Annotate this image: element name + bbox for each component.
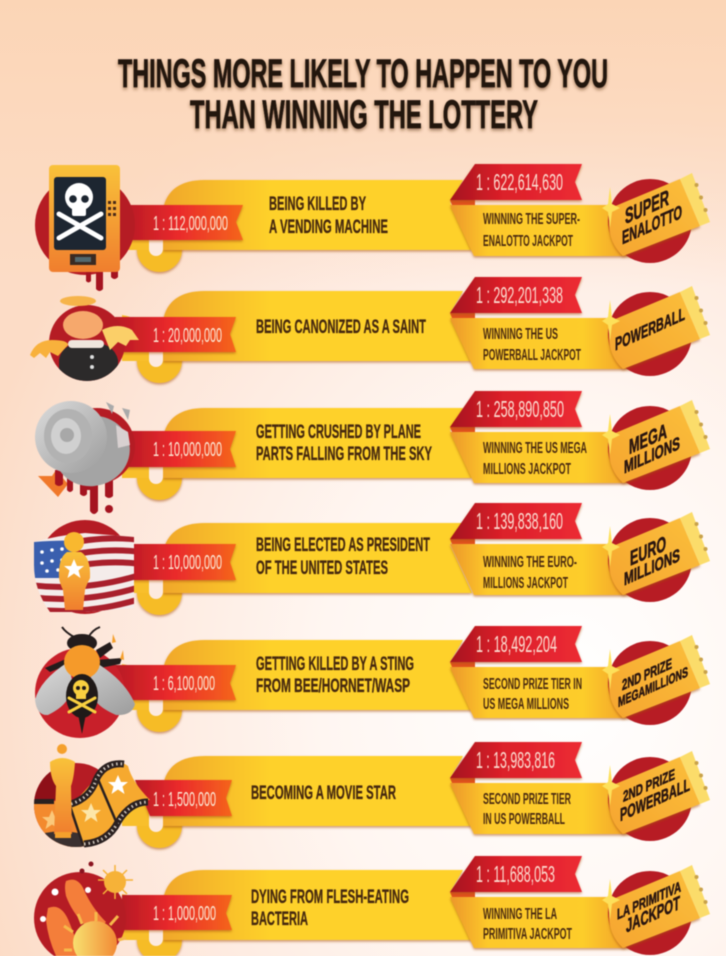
odds ribbon: 1 in 112,000,000 [125,205,243,240]
event text: BEING KILLED BY [269,194,366,215]
lottery panel with ticket: 1 : 139,838,160 [476,508,563,534]
lottery panel with ticket: EURO [630,531,666,571]
lottery panel with ticket [450,503,710,602]
event text: BEING CANONIZED AS A SAINT [256,317,426,338]
lottery panel with ticket: 1 : 18,492,204 [476,631,557,657]
odds ribbon: 1 in 10,000,000 [125,544,236,580]
odds ribbon: 1 in 20,000,000: 1 : 20,000,000 [153,325,222,347]
icon: falling jet engine [35,401,138,514]
event text: BACTERIA [251,909,308,930]
row 7: flesh-eating bacteria versus La Primitiva [34,856,710,956]
odds ribbon: 1 in 6,100,000 [115,665,236,700]
odds ribbon: 1 in 1,500,000 [135,780,232,816]
icon: deadly bee [35,627,135,738]
row 1: vending machine versus SuperEnalotto [35,164,710,291]
icon: film reel and golden statue [30,744,150,851]
lottery panel with ticket: IN US POWERBALL [483,811,565,828]
lottery panel with ticket [450,391,710,490]
icon: vending machine with skull [35,165,135,291]
event text: GETTING CRUSHED BY PLANE [256,422,421,443]
event text: PARTS FALLING FROM THE SKY [256,444,432,465]
lottery panel with ticket: 1 : 622,614,630 [476,169,563,195]
row 4: US president versus EuroMillions [30,503,710,615]
lottery panel with ticket: 2ND PRIZE [623,766,675,806]
yellow banner [122,640,472,732]
lottery panel with ticket: MEGAMILLIONS [618,665,688,711]
odds ribbon: 1 in 1,000,000: 1 : 1,000,000 [153,903,216,925]
event text [251,887,409,930]
lottery panel with ticket: WINNING THE US [483,326,558,343]
lottery panel with ticket [450,277,710,376]
yellow banner [122,870,472,956]
odds ribbon: 1 in 10,000,000 [125,431,236,467]
event text [256,422,432,465]
lottery panel with ticket: WINNING THE EURO- [483,554,577,571]
event text: BECOMING A MOVIE STAR [251,783,396,804]
lottery panel with ticket: 1 : 292,201,338 [476,282,563,308]
lottery panel with ticket: WINNING THE SUPER- [483,211,580,228]
event text: GETTING KILLED BY A STING [256,654,414,675]
title [118,52,608,137]
lottery panel with ticket: POWERBALL JACKPOT [483,347,581,364]
yellow banner [122,291,472,383]
event text: OF THE UNITED STATES [256,558,388,579]
lottery panel with ticket: MILLIONS [624,432,680,477]
odds ribbon: 1 in 112,000,000: 1 : 112,000,000 [153,213,228,235]
lottery panel with ticket: 1 : 13,983,816 [476,747,555,773]
lottery panel with ticket: PRIMITIVA JACKPOT [483,926,572,943]
yellow banner [122,756,472,848]
lottery panel with ticket: MILLIONS JACKPOT [483,461,571,478]
odds ribbon: 1 in 6,100,000: 1 : 6,100,000 [153,673,215,695]
row 6: movie star versus Powerball second prize [30,742,710,851]
lottery panel with ticket: MEGA [629,418,667,459]
event text: DYING FROM FLESH-EATING [251,887,409,908]
lottery panel with ticket [450,626,710,725]
lottery panel with ticket: ENALOTTO [622,202,682,249]
odds ribbon: 1 in 1,000,000 [122,895,232,930]
row 5: bee sting versus Mega Millions second prize [35,626,710,738]
lottery panel with ticket: ENALOTTO JACKPOT [483,233,573,250]
lottery panel with ticket [450,742,710,841]
lottery panel with ticket: WINNING THE LA [483,906,557,923]
odds ribbon: 1 in 1,500,000: 1 : 1,500,000 [153,789,216,811]
lottery panel with ticket: MILLIONS [624,544,680,589]
row 2: canonized saint versus Powerball [30,277,710,383]
lottery panel with ticket [450,856,710,955]
odds ribbon: 1 in 20,000,000 [115,317,236,352]
odds ribbon: 1 in 10,000,000: 1 : 10,000,000 [153,439,222,461]
row 3: plane parts versus Mega Millions [35,391,710,514]
lottery panel with ticket: WINNING THE US MEGA [483,440,587,457]
event text [269,194,388,238]
lottery panel with ticket: MILLIONS JACKPOT [483,575,568,592]
lottery panel with ticket: JACKPOT [626,892,680,937]
lottery panel with ticket: 1 : 258,890,850 [476,396,564,422]
yellow banner [122,180,472,272]
lottery panel with ticket: 2ND PRIZE [622,656,672,694]
lottery panel with ticket: US MEGA MILLIONS [483,696,569,713]
icon: American flag and president figure [30,520,140,615]
icon: bacteria and virus [34,862,133,956]
event text [256,535,430,579]
lottery panel with ticket: SECOND PRIZE TIER IN [483,676,582,693]
event text [256,654,414,697]
lottery panel with ticket [450,164,710,263]
icon: saint with halo and wings [30,296,139,381]
lottery panel with ticket: 1 : 11,688,053 [476,861,555,887]
lottery panel with ticket: SUPER [625,184,669,229]
yellow banner [122,408,472,500]
event text: FROM BEE/HORNET/WASP [256,676,410,697]
event text: BEING ELECTED AS PRESIDENT [256,535,430,556]
event text: A VENDING MACHINE [269,217,388,238]
lottery panel with ticket: SECOND PRIZE TIER [483,791,571,808]
yellow banner [122,523,472,615]
lottery panel with ticket: LA PRIMITIVA [617,879,681,924]
odds ribbon: 1 in 10,000,000: 1 : 10,000,000 [153,552,222,574]
